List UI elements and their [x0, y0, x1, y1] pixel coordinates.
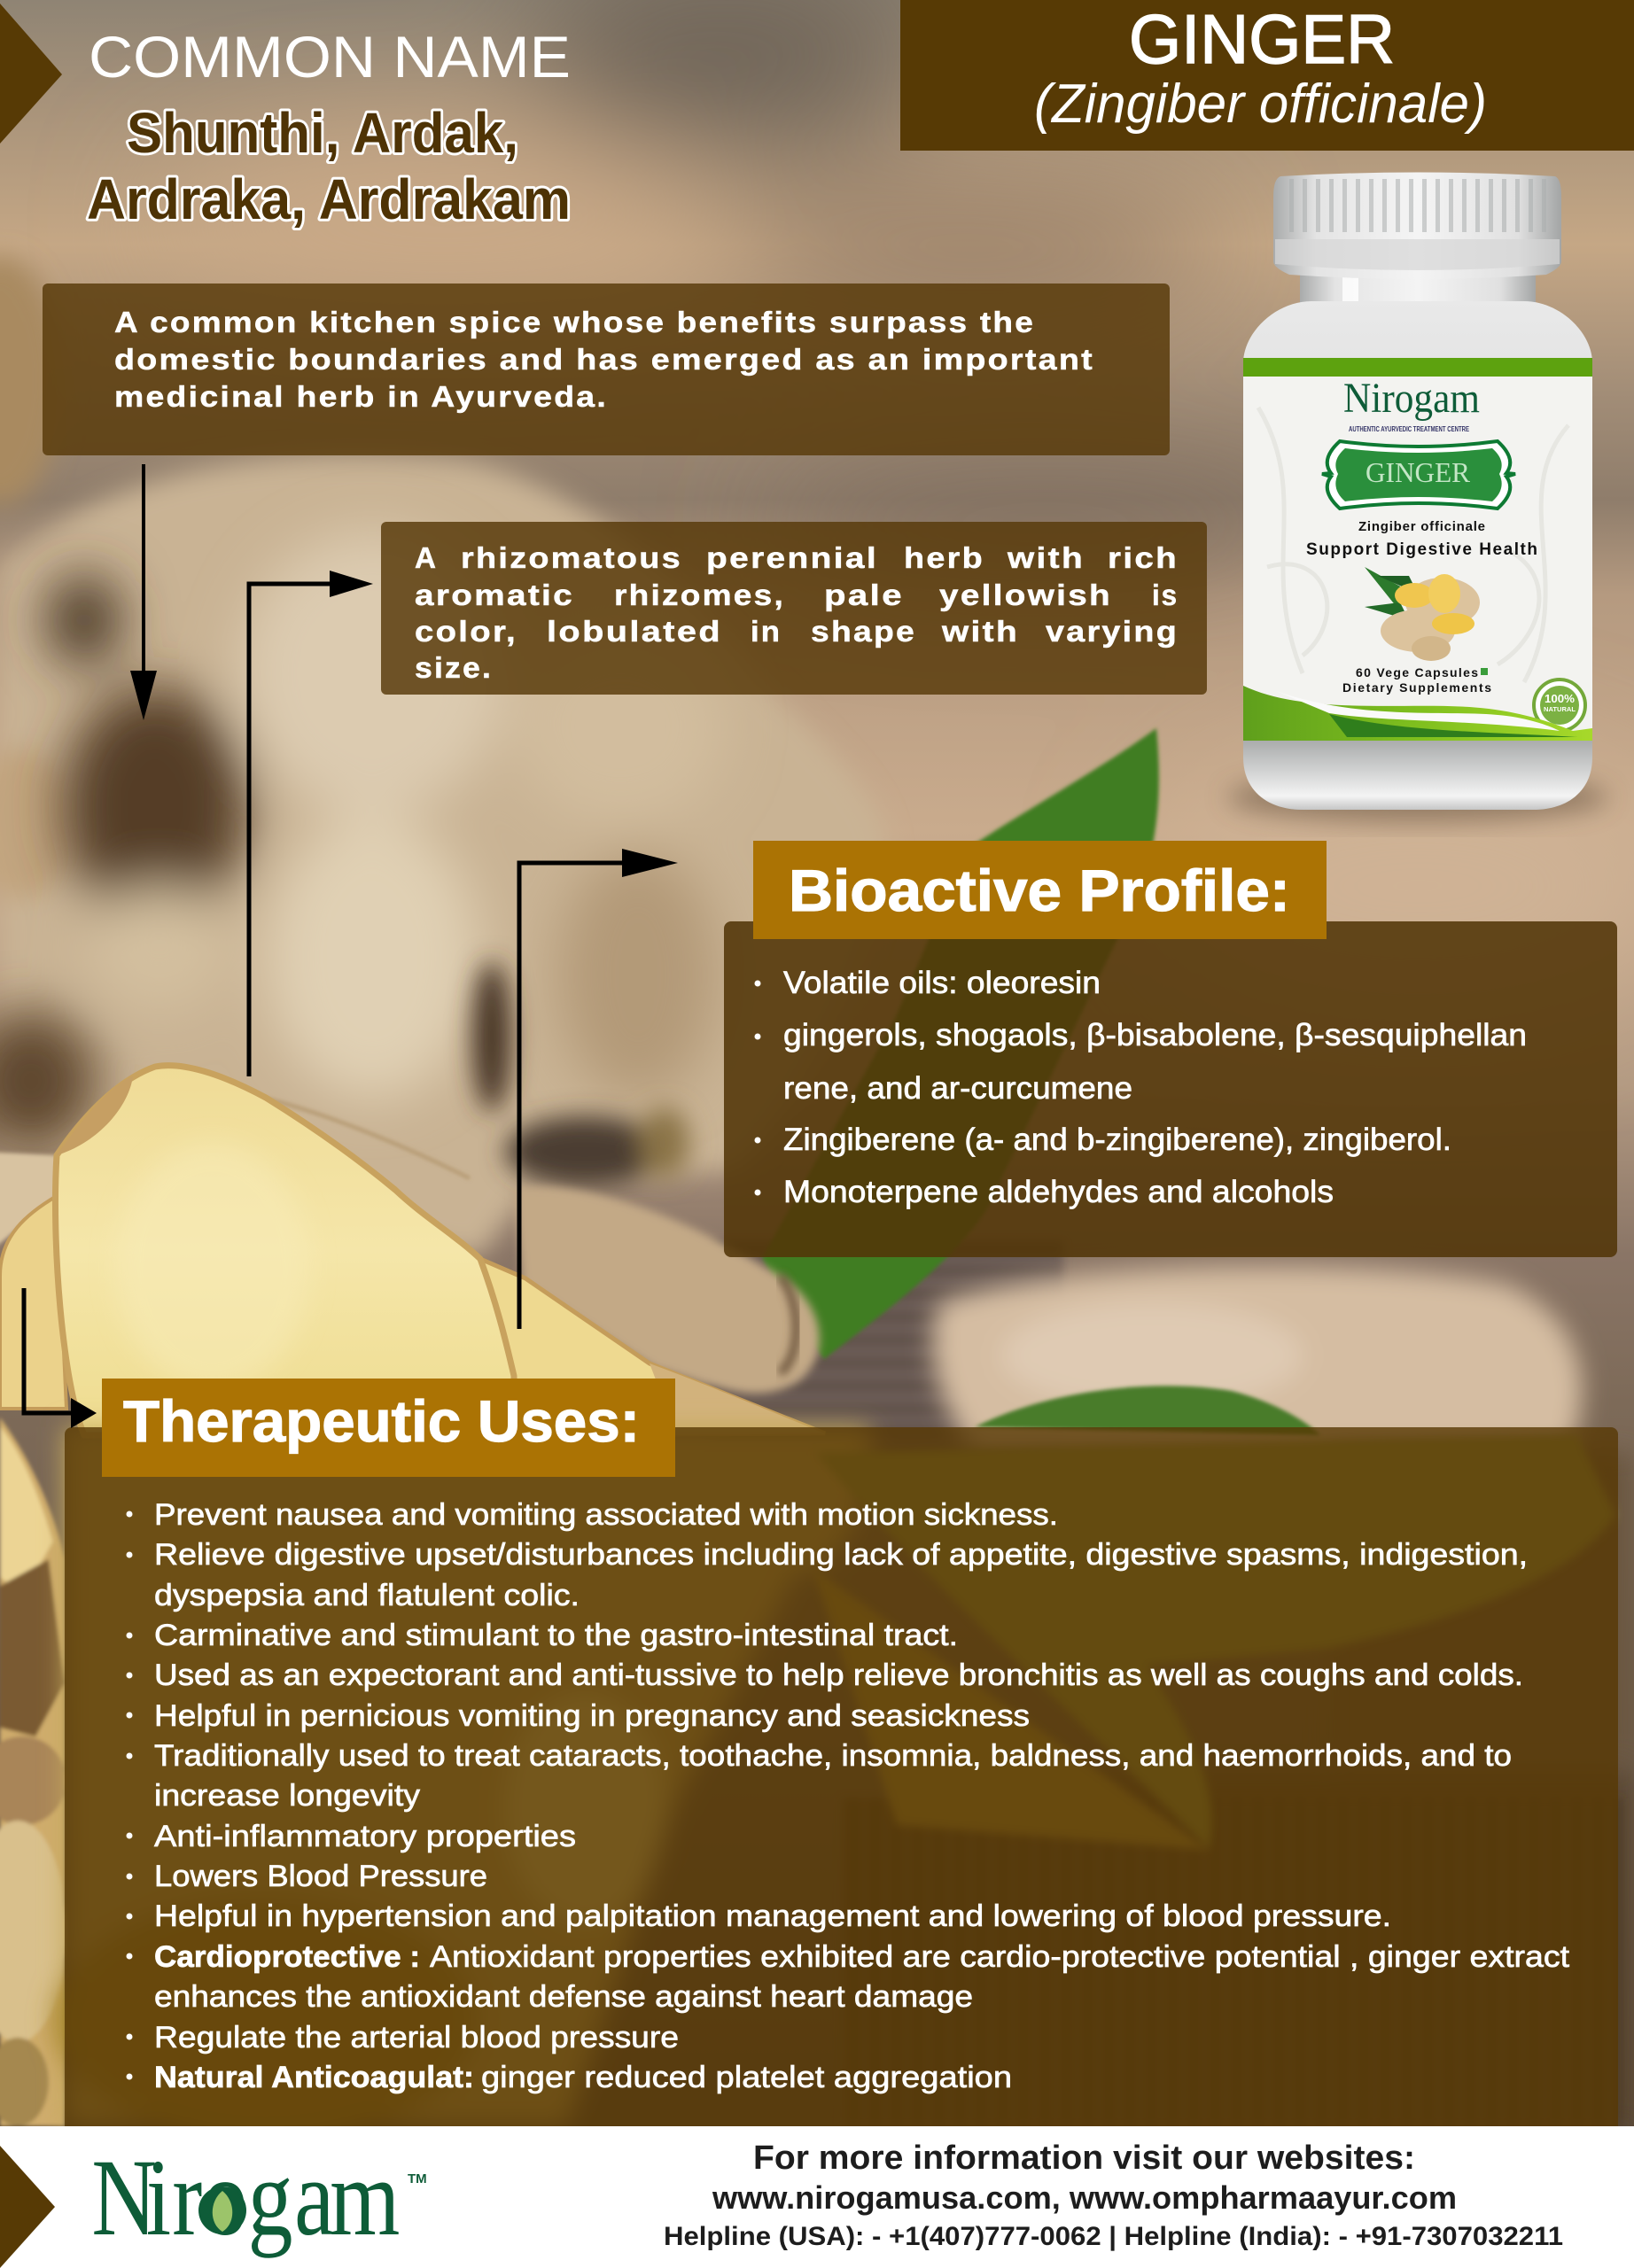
panel: rhizome description: rhizomes,	[614, 579, 785, 611]
heading: bioactive profile: Bioactive Profile:	[789, 858, 1290, 923]
panel: rhizome description: rhizomatous	[461, 541, 682, 574]
therapeutic uses list: Cardioprotective :	[154, 1940, 420, 1974]
bottle neck	[1300, 257, 1536, 315]
green leaf upper	[762, 728, 1159, 1359]
arrow: intro down	[130, 464, 157, 720]
icon: leaf in logo	[198, 2186, 246, 2234]
footer band	[0, 2126, 1634, 2268]
panel: intro description	[43, 284, 1170, 455]
ginger slices	[0, 1066, 825, 1435]
bottle shoulder and base	[1243, 301, 1592, 810]
therapeutic uses list: increase longevity	[154, 1779, 420, 1813]
therapeutic uses list: Prevent nausea and vomiting associated with motion sickness.	[154, 1498, 1058, 1532]
label strapline: AUTHENTIC AYURVEDIC TREATMENT CENTRE	[1349, 425, 1470, 433]
background seen through the uses panel	[53, 1427, 1634, 2144]
therapeutic uses list: Traditionally used to treat cataracts, toothache, insomnia, baldness, and haemorrhoids, and to	[154, 1739, 1512, 1773]
panel: rhizome description: color,	[415, 615, 517, 648]
heading: therapeutic uses: Therapeutic Uses:	[123, 1388, 640, 1454]
label: Support Digestive Health	[1306, 540, 1537, 559]
panel: rhizome description: lobulated	[547, 615, 722, 648]
therapeutic uses list: Antioxidant properties exhibited are cardio-protective potential , ginger extract	[430, 1940, 1570, 1974]
arrow: to bioactive profile	[519, 849, 678, 1329]
panel: intro description: domestic boundaries and has emerged as an important	[114, 343, 1094, 376]
icon: footer chevron	[0, 2146, 55, 2268]
logo: Nirogam: TM	[408, 2171, 427, 2186]
distant wood table	[711, 1237, 1067, 1427]
text: common name values	[87, 101, 571, 231]
label text: Zingiber officinale	[1358, 519, 1485, 534]
logo on label: Nirogam	[1343, 375, 1480, 422]
panel: rhizome description: yellowish	[939, 579, 1112, 611]
label capsule count: 60 Vege Capsules	[1356, 665, 1478, 680]
blurred ginger body	[0, 257, 1582, 1453]
therapeutic uses list: ginger reduced platelet aggregation	[481, 2061, 1012, 2094]
label	[1243, 358, 1592, 741]
panel: rhizome description: pale	[824, 579, 904, 611]
panel: intro description: A common kitchen spice whose benefits surpass the	[114, 306, 1035, 338]
panel: rhizome description: with	[1007, 541, 1085, 574]
lower left ginger chunks	[0, 1418, 66, 2126]
arrow: to therapeutic uses	[24, 1288, 97, 1428]
panel: rhizome description: perennial	[706, 541, 878, 574]
icon: 100 percent natural badge	[1534, 680, 1585, 731]
bioactive list	[755, 966, 1527, 1209]
panel: intro description: medicinal herb in Ayurveda.	[114, 380, 608, 413]
heading: common name: COMMON NAME	[89, 24, 571, 89]
therapeutic uses list: Regulate the arterial blood pressure	[154, 2021, 679, 2054]
panel: rhizome description: with	[941, 615, 1019, 648]
text: common name values: Ardraka, Ardrakam	[87, 167, 571, 231]
panel: rhizome description	[381, 522, 1207, 695]
heading: therapeutic uses	[102, 1379, 675, 1477]
footer contact text: www.nirogamusa.com, www.ompharmaayur.com	[712, 2179, 1457, 2216]
therapeutic uses list: Helpful in pernicious vomiting in pregnancy and seasickness	[154, 1699, 1030, 1733]
bioactive list: rene, and ar-curcumene	[783, 1071, 1132, 1106]
therapeutic uses list: Lowers Blood Pressure	[154, 1860, 487, 1893]
bioactive list: Monoterpene aldehydes and alcohols	[783, 1175, 1334, 1209]
panel: rhizome description: is	[1152, 579, 1179, 611]
logo: Nirogam: Nirogam	[91, 2137, 400, 2258]
title block: GINGER	[1129, 0, 1395, 78]
leaf seen through panel	[815, 1435, 1615, 1850]
icon: 100 percent natural badge: 100%	[1545, 692, 1575, 705]
label plaque: GINGER	[1366, 456, 1471, 488]
panel: rhizome description: herb	[904, 541, 984, 574]
label swoosh	[1243, 686, 1592, 741]
therapeutic uses list: Helpful in hypertension and palpitation management and lowering of blood pressure.	[154, 1899, 1391, 1933]
title block: (Zingiber officinale)	[1034, 74, 1487, 135]
icon: ginger on label	[1365, 567, 1480, 661]
footer contact text: Helpline (USA): - +1(407)777-0062 | Helpline (India): - +91-7307032211	[664, 2222, 1563, 2251]
label: Dietary Supplements	[1342, 680, 1491, 695]
footer contact text	[664, 2140, 1563, 2251]
panel: rhizome description: A	[415, 541, 438, 574]
bottle cap	[1273, 172, 1561, 279]
icon: 100 percent natural badge: NATURAL	[1544, 707, 1576, 713]
therapeutic uses list: dyspepsia and flatulent colic.	[154, 1579, 580, 1612]
label plaque	[1322, 441, 1515, 509]
bioactive list: gingerols, shogaols, β-bisabolene, β-sesquiphellan	[783, 1018, 1527, 1052]
green leaf seen lower right	[975, 1386, 1320, 1435]
heading: bioactive profile	[753, 841, 1327, 939]
bottle of ginger capsules	[1227, 172, 1608, 822]
bioactive list: Volatile oils: oleoresin	[783, 966, 1101, 1000]
arrow: to rhizome panel	[249, 571, 373, 1076]
therapeutic uses list	[126, 1498, 1570, 2094]
panel: rhizome description: in	[751, 615, 782, 648]
therapeutic uses list: enhances the antioxidant defense against heart damage	[154, 1980, 973, 2014]
title block	[900, 0, 1634, 151]
therapeutic uses list: Carminative and stimulant to the gastro-intestinal tract.	[154, 1619, 958, 1652]
footer contact text: For more information visit our websites:	[753, 2140, 1415, 2177]
panel: rhizome description: rich	[1108, 541, 1179, 574]
therapeutic uses list: Used as an expectorant and anti-tussive to help relieve bronchitis as well as coughs and colds.	[154, 1658, 1523, 1692]
bioactive list: Zingiberene (a- and b-zingiberene), zingiberol.	[783, 1122, 1451, 1157]
panel: rhizome description: size.	[415, 651, 493, 684]
therapeutic uses list: Anti-inflammatory properties	[154, 1820, 576, 1853]
therapeutic uses list: Natural Anticoagulat:	[154, 2061, 474, 2094]
panel: rhizome description: varying	[1046, 615, 1179, 648]
panel: bioactive profile	[724, 921, 1617, 1257]
text: common name values: Shunthi, Ardak,	[127, 101, 518, 165]
panel: therapeutic uses	[65, 1427, 1618, 2136]
therapeutic uses list: Relieve digestive upset/disturbances including lack of appetite, digestive spasms, indigestion,	[154, 1538, 1528, 1572]
panel: rhizome description: shape	[811, 615, 916, 648]
panel: rhizome description: aromatic	[415, 579, 574, 611]
icon: top left chevron	[0, 4, 62, 144]
